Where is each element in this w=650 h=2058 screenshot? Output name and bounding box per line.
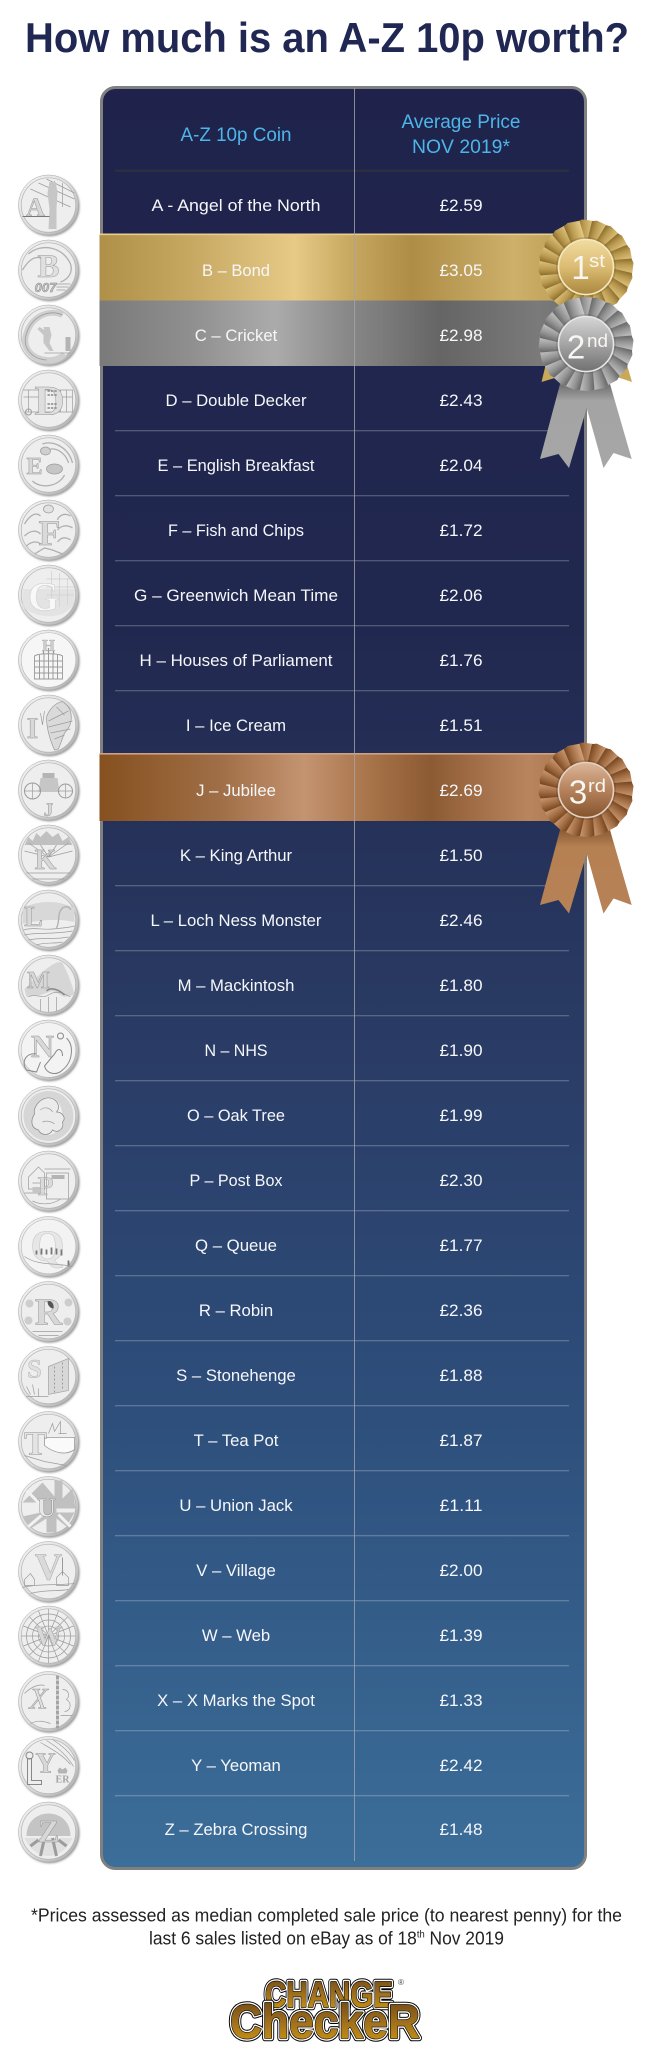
logo: Change Checker [230,1974,420,2049]
column heading: price: NOV 2019* [412,136,510,158]
row B: £3.05 [440,261,482,280]
coin J [18,760,80,821]
row I: £1.51 [440,716,482,735]
band: gold first place row [100,234,587,300]
row H: H – Houses of Parliament [140,651,333,670]
row J: £2.69 [440,781,482,800]
row A: £2.59 [440,196,482,215]
row Z: £1.48 [440,1820,482,1839]
coin L [18,890,80,951]
row H: £1.76 [440,651,482,670]
logo: Change Checker: CheckeR [230,1996,420,2049]
row L: L – Loch Ness Monster [151,911,322,930]
row A: A - Angel of the North [152,196,320,215]
coin I: I [27,712,38,745]
coin I [18,695,80,756]
row C: £2.98 [440,326,482,345]
coin P [18,1151,80,1212]
row P: £2.30 [440,1171,482,1190]
row C: C – Cricket [195,326,278,345]
coin F [18,500,80,561]
row Z [165,1820,482,1839]
row J: J – Jubilee [196,781,276,800]
row V: £2.00 [440,1561,482,1580]
row T: £1.87 [440,1431,482,1450]
coin T: T [24,1426,47,1462]
coin Q [18,1216,80,1278]
row H [140,651,482,670]
row U: £1.11 [440,1496,482,1515]
row E: £2.04 [440,456,482,475]
icon: bronze third place rosette [538,742,634,914]
coin column [18,175,80,1863]
row D: D – Double Decker [166,391,307,410]
row K [180,846,482,865]
row C [195,326,482,345]
row V [196,1561,482,1580]
row G [134,586,482,605]
row Y [191,1756,482,1775]
coin E [18,435,80,496]
coin R: R [35,1292,63,1334]
row I: I – Ice Cream [186,716,286,735]
row X [157,1691,482,1710]
coin D: D [34,379,65,425]
row T: T – Tea Pot [194,1431,279,1450]
row A [152,196,482,215]
row F [168,521,482,540]
footnote: th [417,1930,425,1940]
logo: Change Checker: CheckeR [230,1996,420,2049]
logo: Change Checker: CHANGE [265,1974,393,2015]
coin O [18,1086,80,1147]
coin K: K [35,845,57,876]
row P: P – Post Box [190,1171,283,1190]
title: How much is an A-Z 10p worth? [25,14,629,61]
row W [202,1626,482,1645]
row G: £2.06 [440,586,482,605]
coin A [18,175,80,236]
row B: B – Bond [202,261,270,280]
coin K [18,825,80,886]
row B [202,261,482,280]
coin J: J [44,800,53,821]
icon: bronze third place rosette: rd [588,776,606,796]
row M: £1.80 [440,976,482,995]
row R: £2.36 [440,1301,482,1320]
band: silver second place row [100,300,587,366]
coin E: E [26,454,43,480]
row X: X – X Marks the Spot [157,1691,315,1710]
coin M [18,955,80,1016]
row K: K – King Arthur [180,846,293,865]
coin B [18,240,80,301]
coin W: W [35,1621,62,1651]
coin U: U [37,1494,56,1522]
coin G: G [28,574,59,619]
coin Y [18,1736,80,1798]
row Q: Q – Queue [195,1236,277,1255]
footnote: *Prices assessed as median completed sale price (to nearest penny) for the [31,1904,622,1926]
coin H [18,630,80,691]
coin N [18,1020,80,1081]
column heading: price [402,111,520,158]
coin W [18,1606,80,1667]
coin X: X [28,1682,49,1716]
row Y: £2.42 [440,1756,482,1775]
coin S [18,1346,80,1408]
coin A: A [26,193,45,222]
row F: F – Fish and Chips [168,521,304,540]
row R: R – Robin [199,1301,273,1320]
band: bronze third place row [100,753,587,821]
row V: V – Village [196,1561,276,1580]
coin U [18,1476,80,1538]
row S [176,1366,482,1385]
icon: silver second place rosette: 2 [567,328,585,366]
row L: £2.46 [440,911,482,930]
logo: Change Checker: CHANGE [265,1974,393,2015]
row I [186,716,482,735]
icon: gold first place rosette [538,219,634,391]
coin D [18,370,80,431]
row J [196,781,482,800]
row O [187,1106,482,1125]
row N: N – NHS [204,1041,268,1060]
column heading: coin: A-Z 10p Coin [180,124,292,146]
coin H: H [42,636,55,655]
row U [179,1496,482,1515]
coin B: 007 [35,280,57,295]
row R [199,1301,482,1320]
coin Q: Q [30,1222,65,1270]
icon: gold first place rosette: st [589,251,605,271]
logo: Change Checker: CheckeR [230,1996,420,2049]
coin Z [18,1802,80,1863]
row W: £1.39 [440,1626,482,1645]
coin M: M [27,968,50,994]
row L [151,911,482,930]
row E: E – English Breakfast [158,456,315,475]
coin B: B [37,249,60,285]
icon: silver second place rosette: nd [587,331,608,351]
row O: £1.99 [440,1106,482,1125]
row M: M – Mackintosh [178,976,294,995]
logo: Change Checker: CHANGE [265,1974,393,2015]
row M [178,976,482,995]
logo: Change Checker: ® [398,1978,404,1987]
row S: £1.88 [440,1366,482,1385]
row G: G – Greenwich Mean Time [134,586,338,605]
coin C [18,305,80,366]
row D [166,391,482,410]
coin R [18,1282,80,1343]
row X: £1.33 [440,1691,482,1710]
row Q: £1.77 [440,1236,482,1255]
row T [194,1431,482,1450]
coin L: L [24,902,43,933]
panel: price table [100,88,587,1868]
coin V: V [35,1546,63,1588]
row E [158,456,482,475]
row O: O – Oak Tree [187,1106,285,1125]
column heading: price: Average Price [402,111,520,133]
row W: W – Web [202,1626,270,1645]
coin Y: ER [56,1774,70,1786]
row N [204,1041,482,1060]
row P [190,1171,482,1190]
footnote [31,1904,622,1948]
row S: S – Stonehenge [176,1366,296,1385]
row Z: Z – Zebra Crossing [165,1820,307,1839]
icon: bronze third place rosette: 3 [569,774,587,810]
coin N: N [31,1028,54,1064]
coin S: S [27,1354,42,1384]
coin T [18,1412,80,1473]
footnote: Nov 2019 [425,1928,504,1948]
logo: Change Checker: CHANGE [265,1974,393,2015]
logo: Change Checker: CheckeR [230,1996,420,2049]
row Y: Y – Yeoman [191,1756,281,1775]
coin Y: Y [35,1748,56,1780]
row U: U – Union Jack [179,1496,293,1515]
icon: silver second place rosette [538,296,634,468]
coin X [18,1672,80,1733]
coin G [18,565,80,626]
coin Z: Z [38,1813,59,1849]
footnote: last 6 sales listed on eBay as of 18 [149,1928,434,1948]
row K: £1.50 [440,846,482,865]
row N: £1.90 [440,1041,482,1060]
coin F: F [38,513,60,553]
row Q [195,1236,482,1255]
coin V [18,1542,80,1603]
icon: gold first place rosette: 1 [571,249,590,286]
row D: £2.43 [440,391,482,410]
coin P: P [38,1172,54,1201]
row F: £1.72 [440,521,482,540]
